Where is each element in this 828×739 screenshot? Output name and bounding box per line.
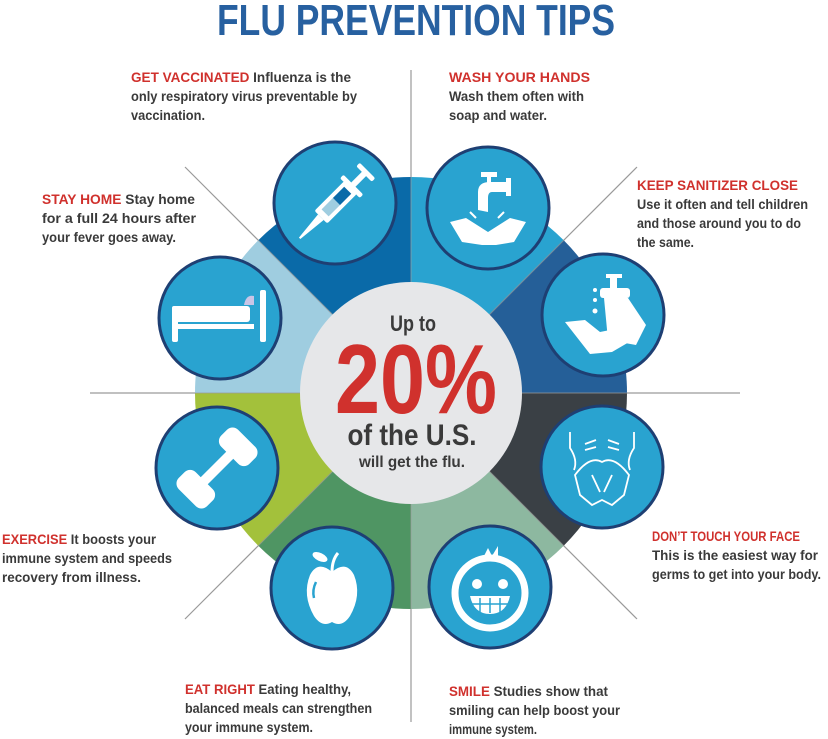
center circle	[300, 282, 522, 504]
text: stay home: STAY HOME Stay home	[42, 191, 195, 207]
text: don't touch your face	[652, 528, 821, 582]
center circle: Up to	[390, 311, 436, 336]
text: eat right: EAT RIGHT Eating healthy,	[185, 681, 351, 697]
icon: wash hands	[427, 147, 549, 269]
text: smile: SMILE Studies show that	[449, 683, 608, 699]
text: wash your hands: WASH YOUR HANDS	[449, 69, 590, 85]
text: keep sanitizer close: the same.	[637, 234, 694, 250]
pie chart	[195, 177, 627, 609]
icon: smile	[429, 526, 551, 648]
text: don't touch your face: This is the easiest way for	[652, 547, 819, 563]
text: eat right: your immune system.	[185, 719, 313, 735]
text: exercise: immune system and speeds	[2, 550, 172, 566]
text: exercise: EXERCISE It boosts your	[2, 531, 157, 547]
icon: sanitizer	[542, 254, 664, 376]
text: eat right	[185, 681, 372, 735]
text: get vaccinated: only respiratory virus preventable by	[131, 88, 357, 104]
text: smile	[449, 683, 620, 737]
text: smile: smiling can help boost your	[449, 702, 620, 718]
text: stay home: your fever goes away.	[42, 229, 176, 245]
text: keep sanitizer close: Use it often and tell children	[637, 196, 808, 212]
text: wash your hands	[449, 69, 590, 123]
text: get vaccinated: GET VACCINATED Influenza is the	[131, 69, 351, 85]
text: smile: immune system.	[449, 721, 537, 737]
icon: bed	[159, 257, 281, 379]
icon: face touching	[541, 406, 663, 528]
icon: dumbbell	[156, 407, 278, 529]
icon: syringe	[274, 142, 396, 264]
text: wash your hands: soap and water.	[449, 107, 547, 123]
text: eat right: balanced meals can strengthen	[185, 700, 372, 716]
text: wash your hands: Wash them often with	[449, 88, 584, 104]
text: keep sanitizer close	[637, 177, 808, 250]
text: get vaccinated	[131, 69, 357, 123]
text: get vaccinated: vaccination.	[131, 107, 205, 123]
center circle: 20%	[335, 324, 497, 434]
text: stay home: for a full 24 hours after	[42, 210, 197, 226]
icon: apple	[271, 527, 393, 649]
text: keep sanitizer close: KEEP SANITIZER CLOSE	[637, 177, 798, 193]
text: stay home	[42, 191, 197, 245]
text: keep sanitizer close: and those around you to do	[637, 215, 801, 231]
text: exercise	[2, 531, 172, 585]
center circle: of the U.S.	[348, 419, 476, 452]
text: exercise: recovery from illness.	[2, 569, 141, 585]
center circle: will get the flu.	[358, 454, 465, 471]
